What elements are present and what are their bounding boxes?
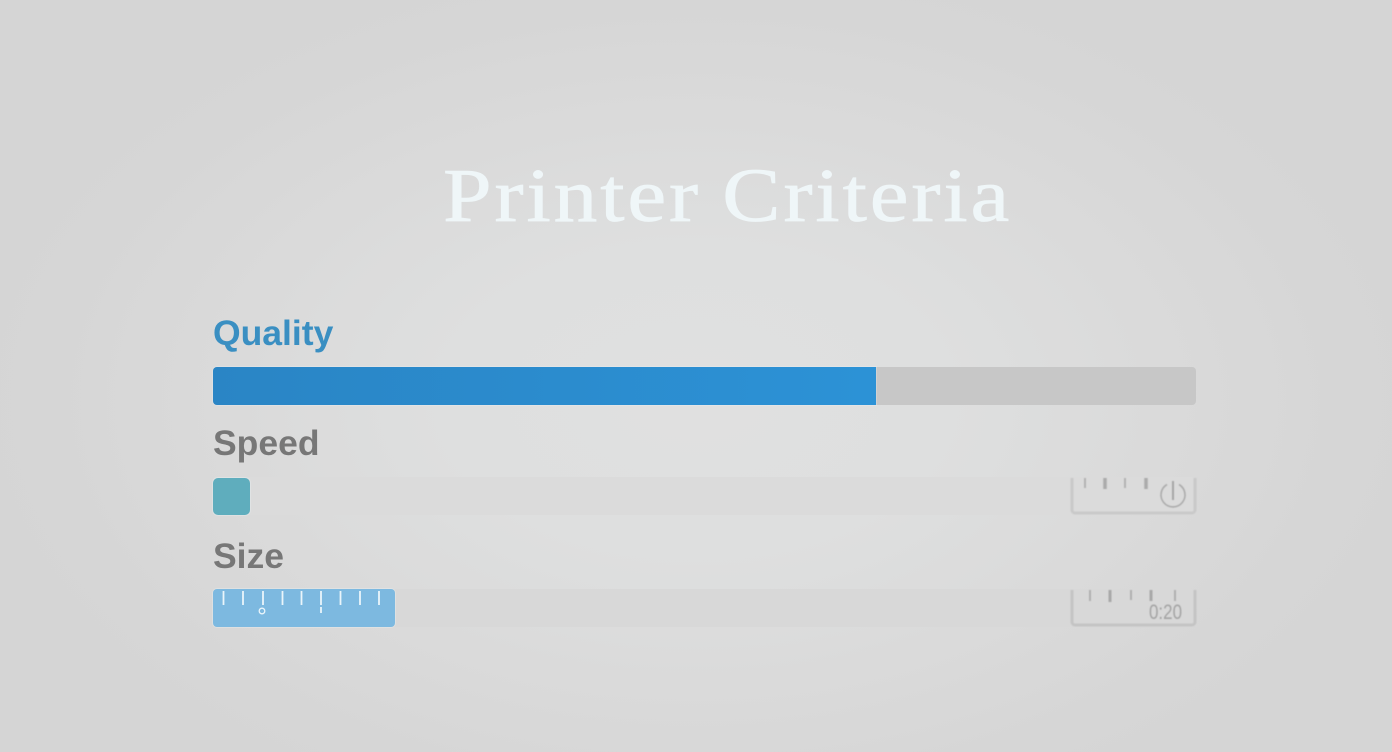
speed bar fill [213,478,250,515]
bar: quality [213,367,1196,405]
bar: speed [213,477,1196,515]
heading: speed: Speed [213,423,320,463]
quality bar fill [213,367,876,405]
size bar fill [213,589,395,627]
icon: speed gauge with power symbol [1070,478,1196,514]
icon: size gauge with readout: 0:20 [1149,601,1182,624]
heading: size: Size [213,536,284,576]
ruler ticks on size bar [222,591,380,614]
title: Printer Criteria [443,154,1012,238]
bar: size [213,589,1196,627]
icon: size gauge with readout [1070,590,1196,626]
heading: quality: Quality [213,313,333,353]
